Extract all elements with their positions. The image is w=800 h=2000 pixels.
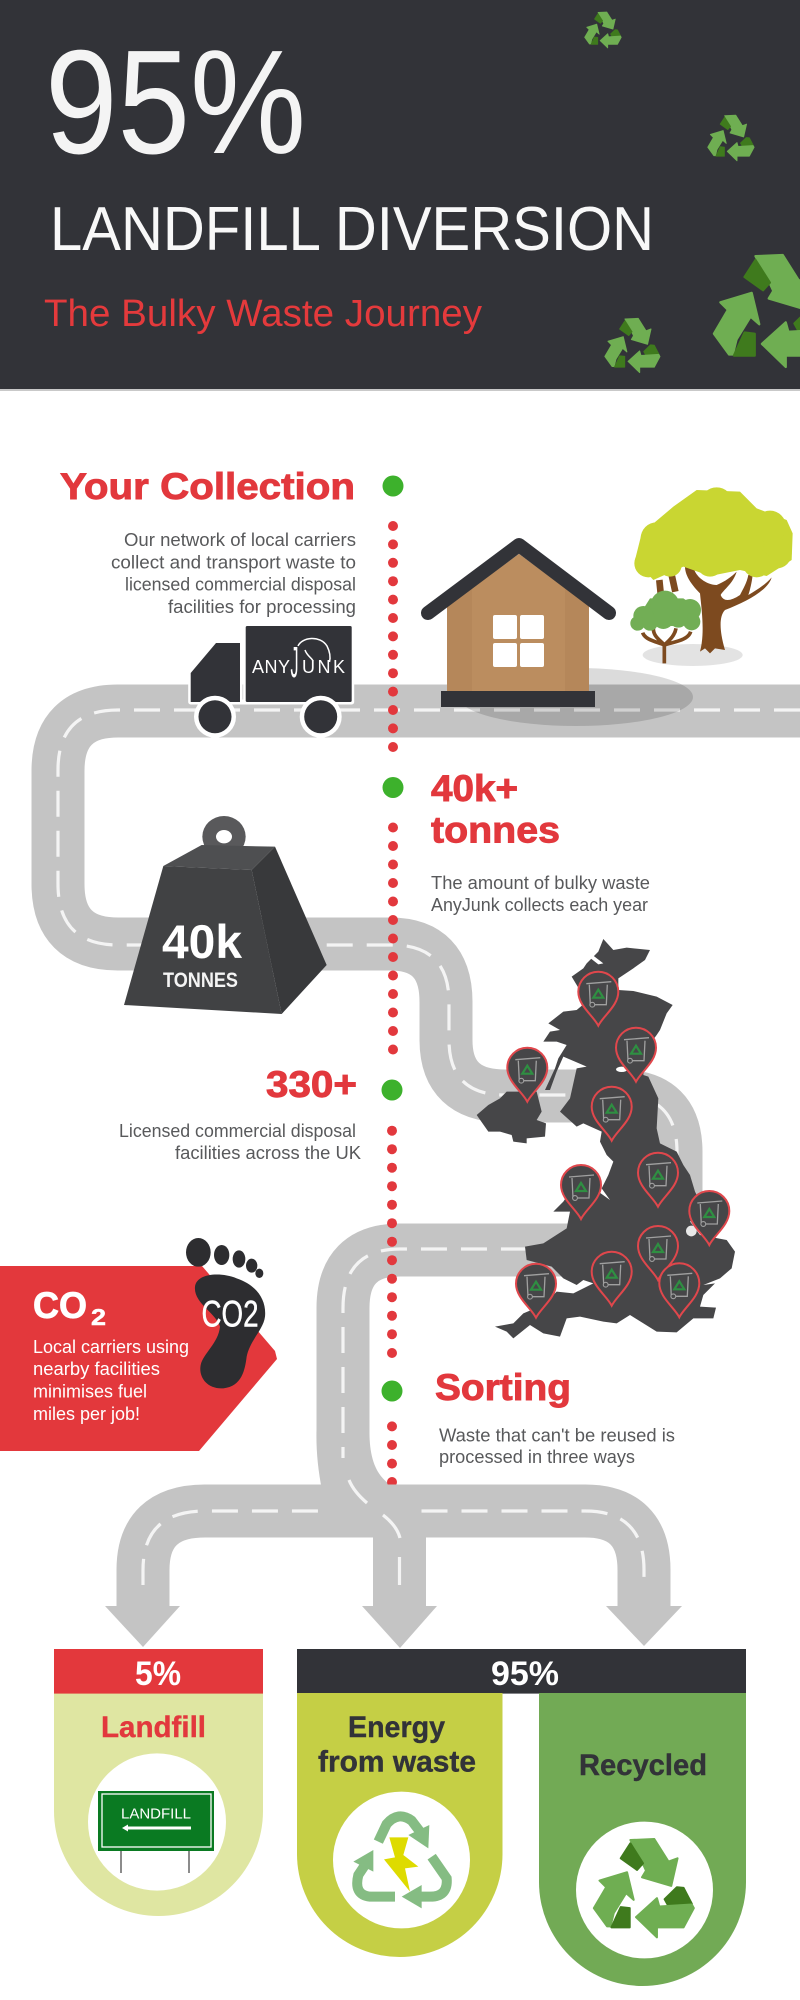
icon: house	[428, 545, 609, 707]
header panel	[0, 0, 800, 391]
heading: CO2: 2	[91, 1304, 106, 1330]
icon: AnyJunk truck: J	[290, 638, 298, 687]
panel: landfill 5%: 5%	[135, 1655, 181, 1693]
map pin 9	[592, 1252, 632, 1306]
map pin 10	[516, 1264, 556, 1318]
map pin 5	[638, 1153, 678, 1207]
text: CO2 description: minimises fuel	[33, 1380, 147, 1402]
headline: 95%: 95%	[45, 20, 306, 185]
road: three-way split with arrows	[105, 1480, 682, 1648]
icon: landfill sign: LANDFILL	[121, 1806, 191, 1823]
banner: 95%	[297, 1649, 746, 1694]
icon: AnyJunk truck: UNK	[302, 657, 345, 677]
icon: recycling lower	[605, 318, 660, 373]
text: collection description: Our network of local carriers	[124, 529, 356, 550]
map pin 1	[578, 972, 618, 1026]
text: CO2 description: Local carriers using	[33, 1336, 189, 1357]
text: collection description: licensed commercial disposal	[125, 574, 356, 595]
subtitle: The Bulky Waste Journey	[44, 293, 482, 335]
icon: 40k weight: 40k	[162, 915, 243, 968]
icon: AnyJunk truck	[191, 626, 352, 738]
icon: trees	[630, 487, 793, 666]
map pin 4	[592, 1087, 632, 1141]
text: facilities description: facilities across the UK	[175, 1142, 362, 1163]
heading: CO2	[33, 1285, 106, 1330]
panel: recycled	[539, 1693, 746, 1986]
icon: recycling small top	[585, 12, 621, 48]
panel: landfill 5%	[54, 1649, 263, 1916]
text: facilities description: Licensed commercial disposal	[119, 1120, 356, 1141]
panel: energy from waste: from waste	[318, 1746, 476, 1778]
dotted red timeline	[387, 521, 398, 1487]
map pin 2	[616, 1028, 656, 1082]
heading: 40k+ tonnes: 40k+	[431, 768, 518, 809]
text: CO2 description	[33, 1336, 189, 1424]
map pin 6	[561, 1165, 601, 1219]
icon: landfill sign	[98, 1791, 214, 1873]
map pin 8	[638, 1226, 678, 1280]
road: winding route	[58, 710, 800, 1490]
text: sorting description: Waste that can't be reused is	[439, 1424, 675, 1445]
text: tonnes description	[431, 872, 650, 915]
heading: your collection: Your Collection	[60, 466, 355, 507]
icon: recycling	[594, 1839, 694, 1937]
icon: AnyJunk truck: ANY	[252, 657, 290, 677]
text: facilities description	[119, 1120, 362, 1163]
map pin 11	[659, 1263, 699, 1317]
heading: CO2: CO	[33, 1285, 87, 1326]
heading: 40k+ tonnes: tonnes	[431, 810, 560, 850]
text: sorting description: processed in three ways	[439, 1446, 635, 1467]
map pin 7	[689, 1191, 729, 1245]
panel: CO2 callout	[0, 1266, 277, 1451]
text: collection description: collect and transport waste to	[111, 552, 356, 572]
icon: CO2 footprint: CO2	[202, 1294, 258, 1335]
panel: energy from waste	[297, 1693, 502, 1957]
icon: recycling large	[714, 255, 800, 367]
panel: recycled: Recycled	[579, 1749, 707, 1782]
icon: energy recycling with bolt	[353, 1816, 447, 1908]
map: UK	[477, 939, 735, 1338]
text: tonnes description: The amount of bulky waste	[431, 872, 650, 893]
green marker: sorting	[382, 1380, 402, 1402]
green marker: collection	[382, 476, 404, 496]
text: collection description	[111, 529, 356, 617]
map pin 3	[507, 1048, 547, 1102]
icon: recycling medium right	[708, 115, 754, 161]
text: tonnes description: AnyJunk collects each year	[431, 894, 648, 915]
icon: 40k weight: TONNES	[163, 969, 238, 992]
banner: 95%: 95%	[491, 1655, 559, 1693]
title: landfill diversion: LANDFILL DIVERSION	[50, 195, 654, 264]
green marker: tonnes	[382, 777, 404, 798]
heading: 330+: 330+	[266, 1064, 357, 1105]
text: collection description: facilities for processing	[168, 596, 356, 617]
heading: sorting: Sorting	[435, 1367, 571, 1408]
panel: landfill 5%: Landfill	[101, 1711, 206, 1744]
text: CO2 description: nearby facilities	[33, 1358, 160, 1379]
text: CO2 description: miles per job!	[33, 1403, 140, 1424]
icon: CO2 footprint	[186, 1238, 265, 1388]
panel: energy from waste: Energy	[348, 1711, 445, 1744]
icon: 40k weight	[124, 816, 327, 1014]
house shadow	[459, 668, 693, 726]
green marker: facilities	[382, 1080, 402, 1100]
text: sorting description	[439, 1424, 675, 1467]
heading: 40k+ tonnes	[431, 768, 560, 850]
